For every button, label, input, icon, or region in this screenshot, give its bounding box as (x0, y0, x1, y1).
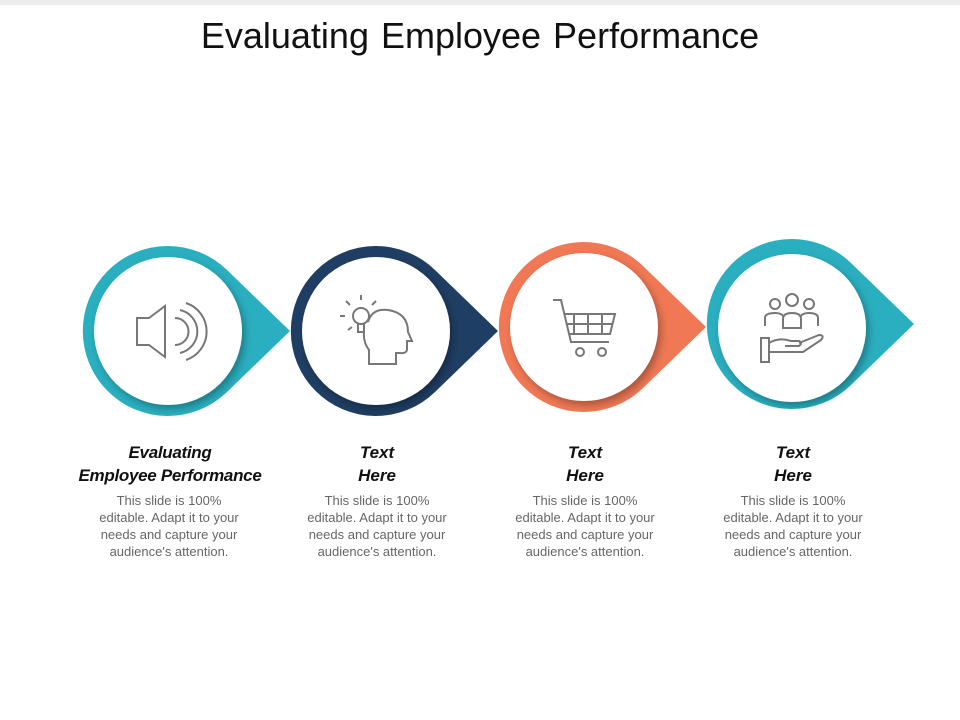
text 3: Text (568, 443, 602, 462)
text 2: Here (358, 466, 396, 485)
icon: speaker (137, 303, 207, 360)
body 2: This slide is 100% (325, 493, 429, 508)
body 1 (99, 493, 239, 559)
text 1 (78, 443, 262, 485)
body 4: audience's attention. (734, 544, 852, 559)
text 4: Text (776, 443, 810, 462)
body 1: audience's attention. (110, 544, 228, 559)
body 1: needs and capture your (101, 527, 237, 542)
icon: people in hand (761, 294, 823, 362)
body 3: editable. Adapt it to your (515, 510, 655, 525)
text 4 (774, 443, 812, 485)
step 4 shape (707, 239, 914, 409)
text 2 (358, 443, 396, 485)
text 4: Here (774, 466, 812, 485)
text 1: Employee Performance (79, 466, 261, 485)
text 1: Evaluating (129, 443, 211, 462)
step 3 shape (499, 242, 706, 412)
body 2 (307, 493, 447, 559)
text 3: Here (566, 466, 604, 485)
title: Evaluating Employee Performance (201, 15, 759, 56)
body 1: This slide is 100% (117, 493, 221, 508)
body 1: editable. Adapt it to your (99, 510, 239, 525)
body 2: needs and capture your (309, 527, 445, 542)
text 2: Text (360, 443, 394, 462)
step 2 shape (291, 246, 498, 416)
icon: head with bulb (340, 295, 412, 364)
text 3 (566, 443, 604, 485)
body 3: audience's attention. (526, 544, 644, 559)
body 4: editable. Adapt it to your (723, 510, 863, 525)
body 4 (723, 493, 863, 559)
body 2: audience's attention. (318, 544, 436, 559)
icon: cart (553, 300, 615, 356)
body 3: needs and capture your (517, 527, 653, 542)
step 1 shape (83, 246, 290, 416)
body 4: This slide is 100% (741, 493, 845, 508)
body 2: editable. Adapt it to your (307, 510, 447, 525)
body 3: This slide is 100% (533, 493, 637, 508)
body 4: needs and capture your (725, 527, 861, 542)
body 3 (515, 493, 655, 559)
